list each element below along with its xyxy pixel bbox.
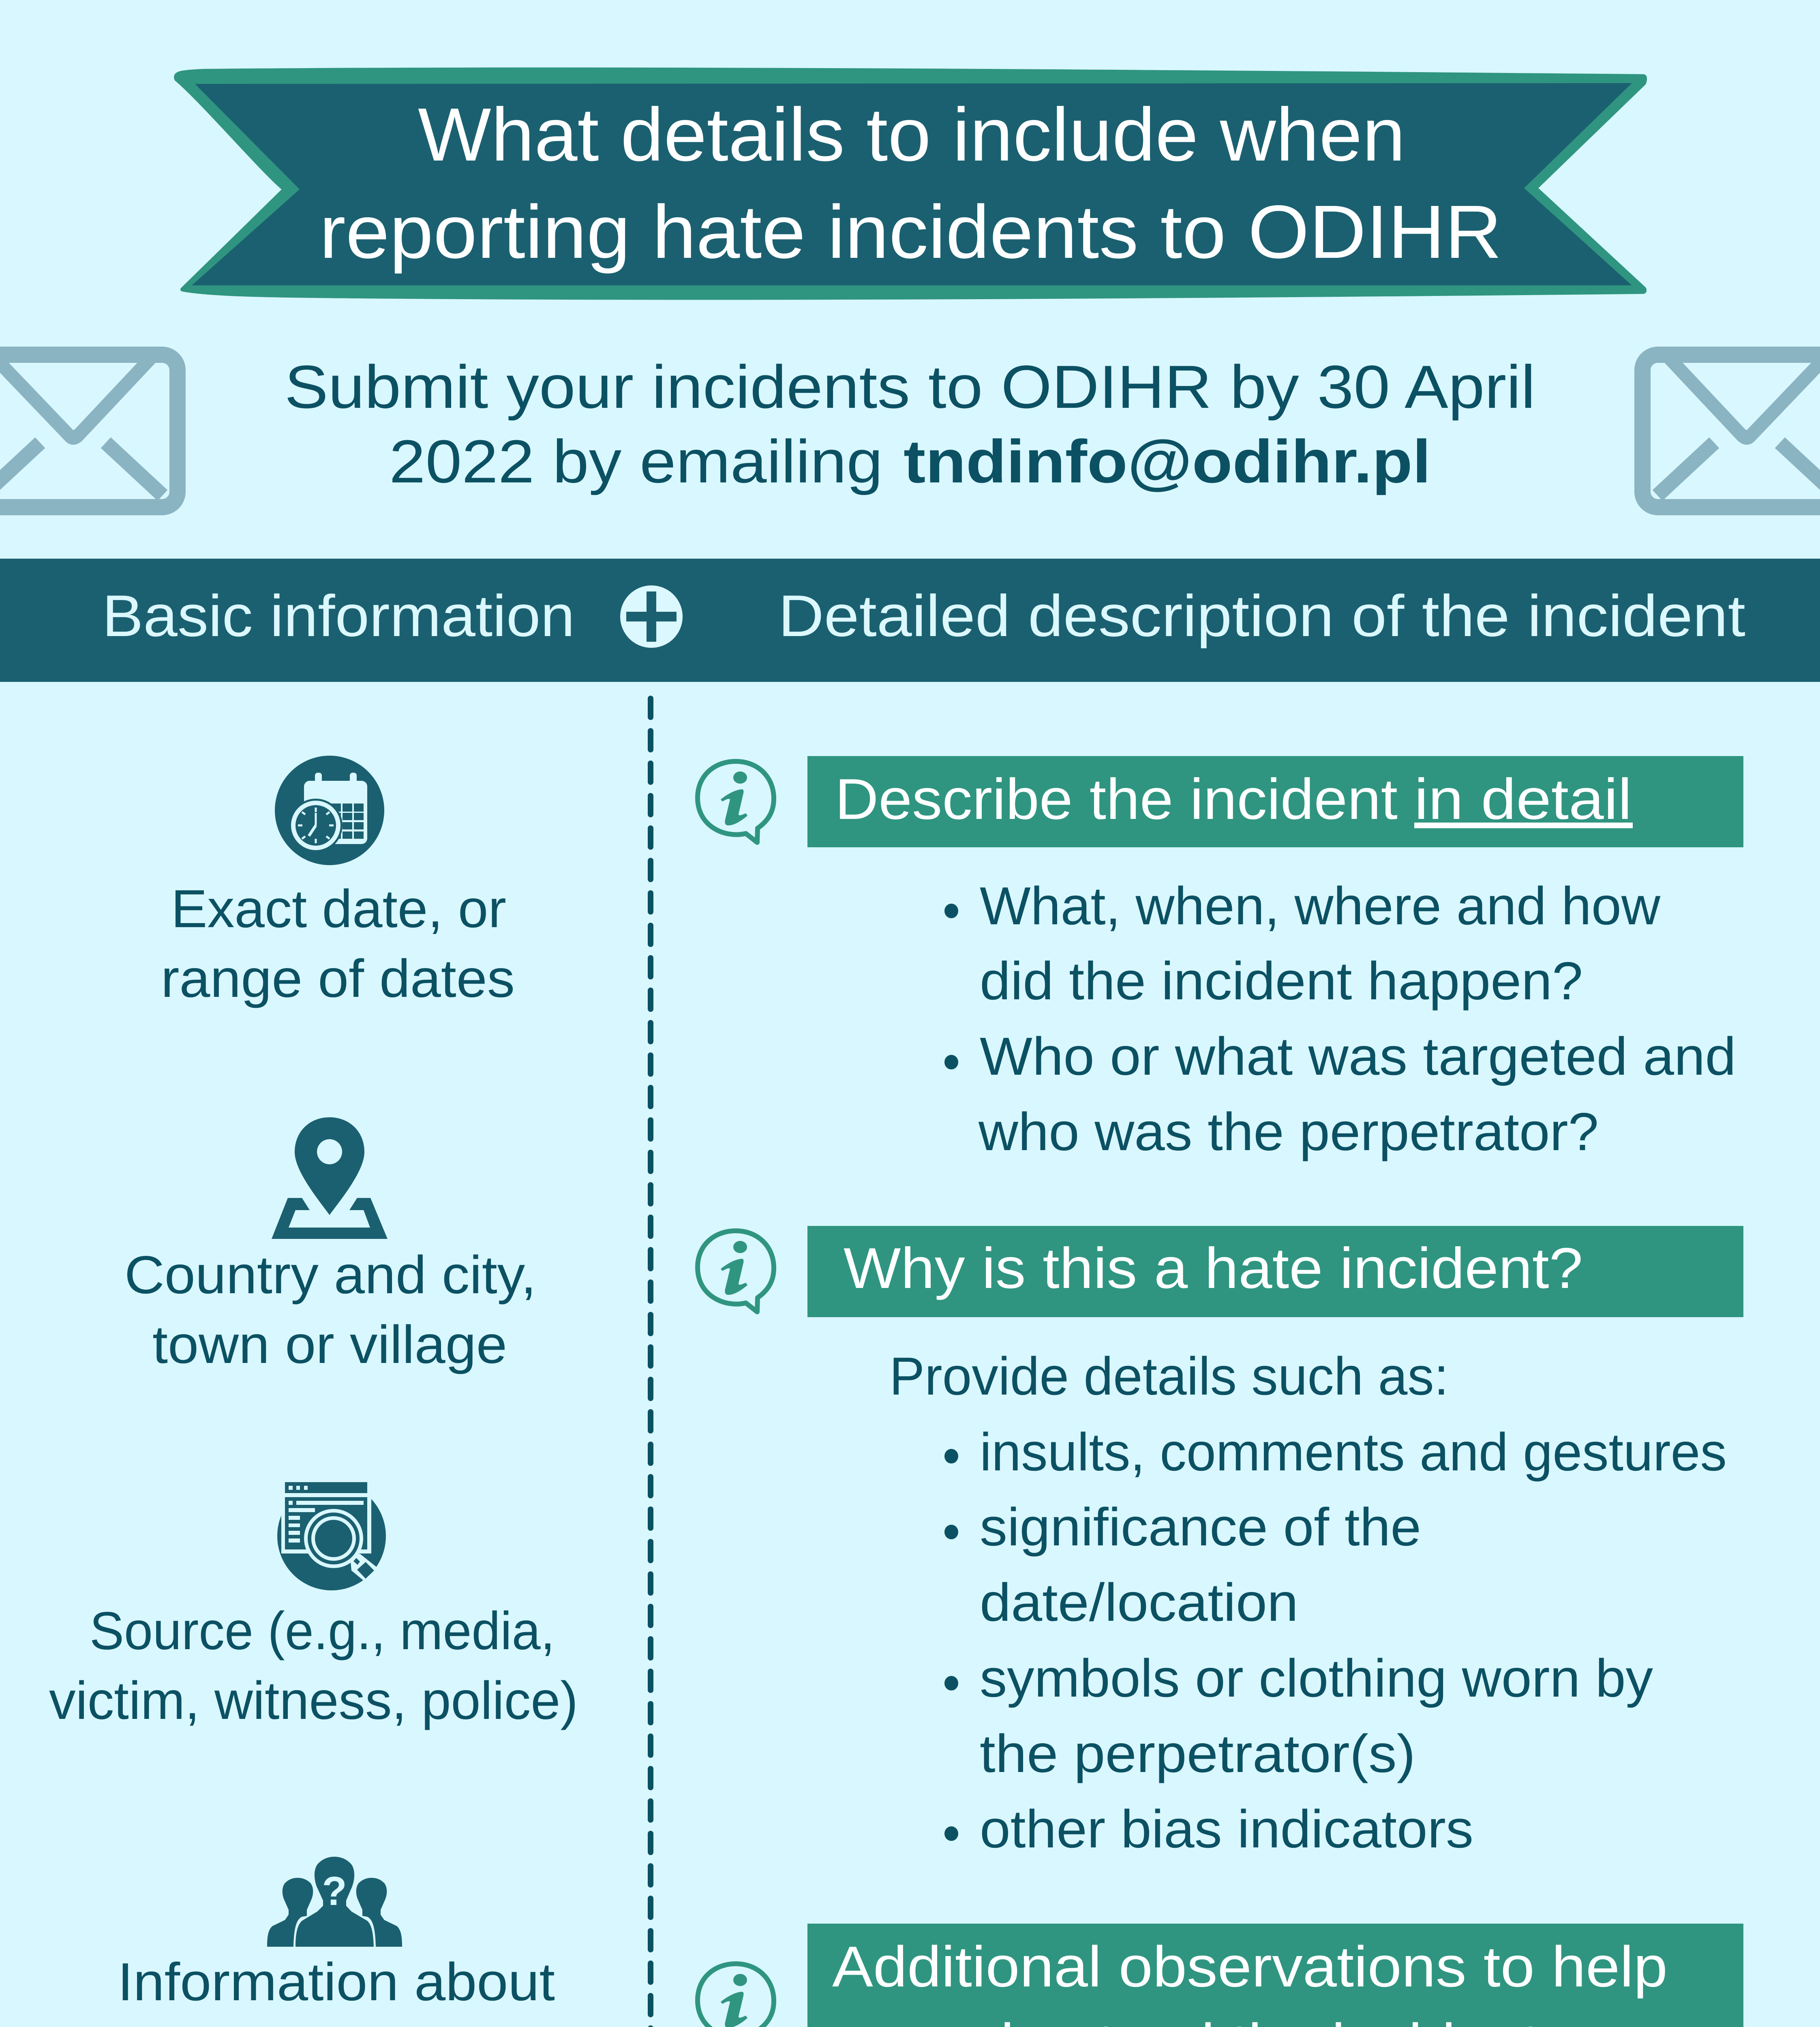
icon: people with question mark: ? [322, 1868, 347, 1914]
bullet list: significance of the [980, 1497, 1421, 1557]
icon: envelope left [0, 355, 178, 507]
item: date [161, 756, 515, 1008]
icon: info bubble [698, 761, 774, 842]
submission instructions [285, 353, 1535, 495]
bullet list: What, when, where and how [980, 876, 1661, 936]
header bar [0, 559, 1820, 682]
bullet list: who was the perpetrator? [978, 1102, 1599, 1161]
label: source [49, 1601, 578, 1730]
item: victim [118, 1857, 555, 2027]
bullet list: insults, comments and gestures [980, 1422, 1727, 1482]
banner ribbon [176, 69, 1645, 298]
icon: info bubble [698, 1964, 774, 2027]
label: source: victim, witness, police) [49, 1671, 578, 1730]
icon: browser and magnifier [277, 1476, 386, 1590]
heading panel [807, 1924, 1743, 2027]
heading: detailed description: Detailed description of the incident [778, 583, 1745, 649]
icon: calendar and clock [275, 756, 384, 865]
heading panel: in detail [1414, 767, 1632, 831]
bullet list [889, 1346, 1727, 1859]
title line 1: What details to include when [418, 93, 1405, 177]
icon: envelope right [1642, 355, 1820, 507]
heading: basic information: Basic information [102, 583, 575, 649]
bullet list: the perpetrator(s) [980, 1724, 1415, 1783]
label: country and city: town or village [152, 1315, 507, 1374]
icon: info bubble [698, 1231, 774, 1312]
heading panel: Why is this a hate incident? [844, 1236, 1583, 1301]
bullet list [944, 876, 1736, 1161]
section: additional observations [698, 1924, 1743, 2027]
bullet list: date/location [980, 1573, 1298, 1632]
label: exact date [161, 879, 515, 1008]
heading panel [807, 1226, 1743, 1317]
label: country and city [124, 1245, 536, 1374]
icon: plus [620, 585, 683, 648]
bullet list: Who or what was targeted and [980, 1026, 1736, 1086]
bullet list: other bias indicators [980, 1799, 1473, 1859]
submission instructions: Submit your incidents to ODIHR by 30 April [285, 353, 1535, 421]
heading panel [807, 756, 1743, 847]
icon: map pin [272, 1117, 388, 1239]
item: source [49, 1476, 578, 1730]
section: describe the incident [698, 756, 1743, 1161]
submission instructions: tndinfo@odihr.pl [904, 427, 1431, 495]
bullet list: did the incident happen? [980, 951, 1583, 1011]
heading panel: Additional observations to help [832, 1935, 1668, 1999]
bullet list: symbols or clothing worn by [980, 1648, 1653, 1708]
label: exact date: Exact date, or [171, 879, 506, 939]
label: source: Source (e.g., media, [90, 1601, 555, 1661]
heading panel: Describe the incident [835, 767, 1398, 831]
title banner [176, 69, 1645, 298]
submission instructions: 2022 by emailing [389, 427, 883, 495]
bullet list: Provide details such as: [889, 1346, 1449, 1406]
label: victim: Information about [118, 1952, 555, 2012]
label: exact date: range of dates [161, 949, 515, 1008]
title line 2: reporting hate incidents to ODIHR [319, 190, 1502, 274]
dashed divider [648, 699, 653, 2027]
section: why is this a hate incident [698, 1226, 1743, 1859]
label: country and city: Country and city, [124, 1245, 536, 1305]
icon: people with question mark [267, 1857, 402, 1947]
item: location [124, 1117, 536, 1374]
